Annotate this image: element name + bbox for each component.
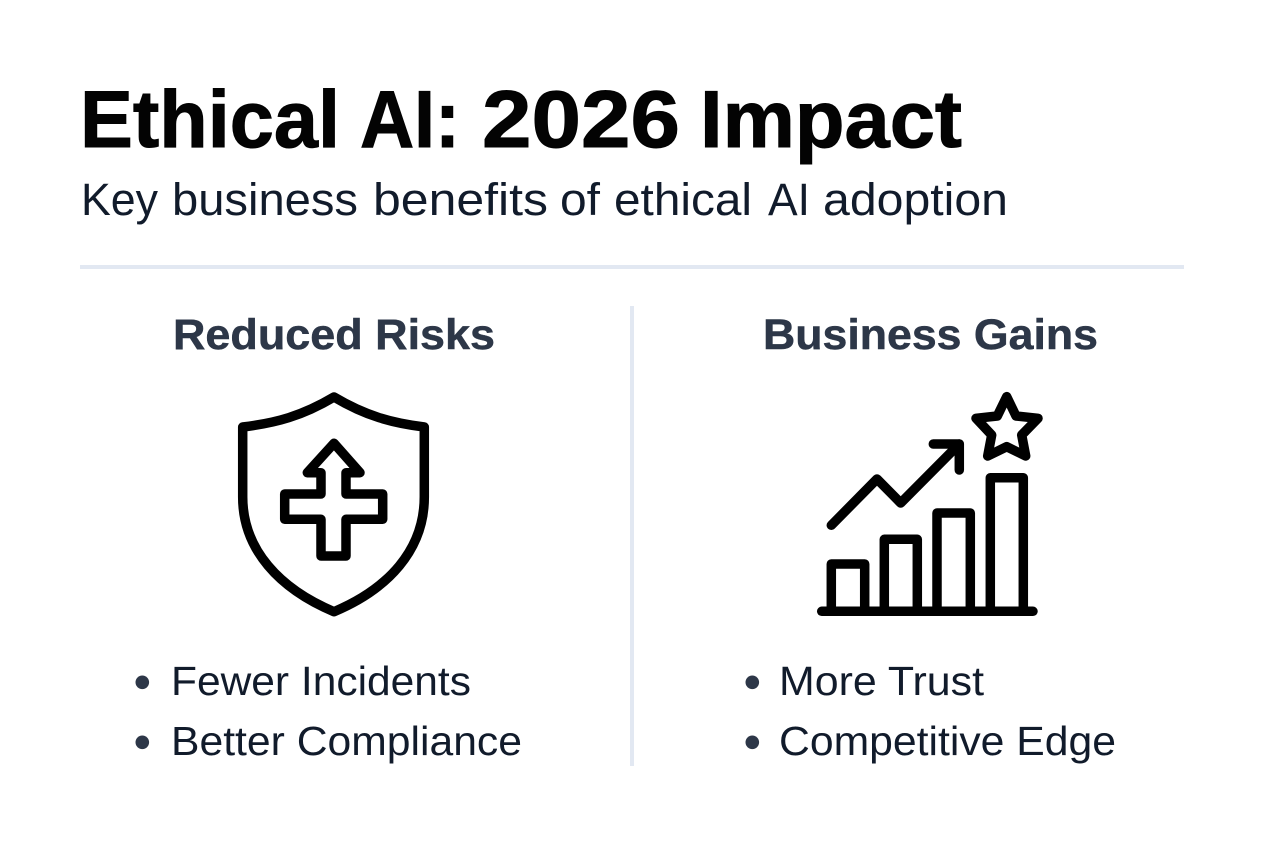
panel: reduced risks — [136, 311, 522, 764]
title — [80, 75, 962, 165]
subtitle: AI — [768, 174, 810, 225]
title: Ethical — [80, 75, 340, 165]
title: AI: — [360, 75, 460, 165]
subtitle: of — [560, 174, 601, 225]
list: gains bullets — [746, 658, 1116, 764]
list: gains bullets: More Trust — [779, 658, 985, 704]
icon: rising bar chart with arrow and star — [822, 397, 1038, 611]
list: risk bullets: Better Compliance — [171, 718, 522, 764]
list: gains bullets: Competitive Edge — [779, 718, 1116, 764]
list: risk bullets: Fewer Incidents — [171, 658, 471, 704]
subtitle: ethical — [614, 174, 752, 225]
heading: business gains: Business Gains — [763, 311, 1098, 359]
icon: shield with arrow cross — [243, 397, 424, 612]
subtitle — [81, 174, 1008, 225]
subtitle: Key — [81, 174, 158, 225]
subtitle: adoption — [823, 174, 1008, 225]
title: 2026 — [482, 75, 680, 165]
subtitle: business — [172, 174, 358, 225]
title: Impact — [700, 75, 962, 165]
list: risk bullets — [136, 658, 522, 764]
heading: reduced risks: Reduced Risks — [173, 311, 495, 359]
panel: business gains — [746, 311, 1116, 764]
subtitle: benefits — [373, 174, 548, 225]
